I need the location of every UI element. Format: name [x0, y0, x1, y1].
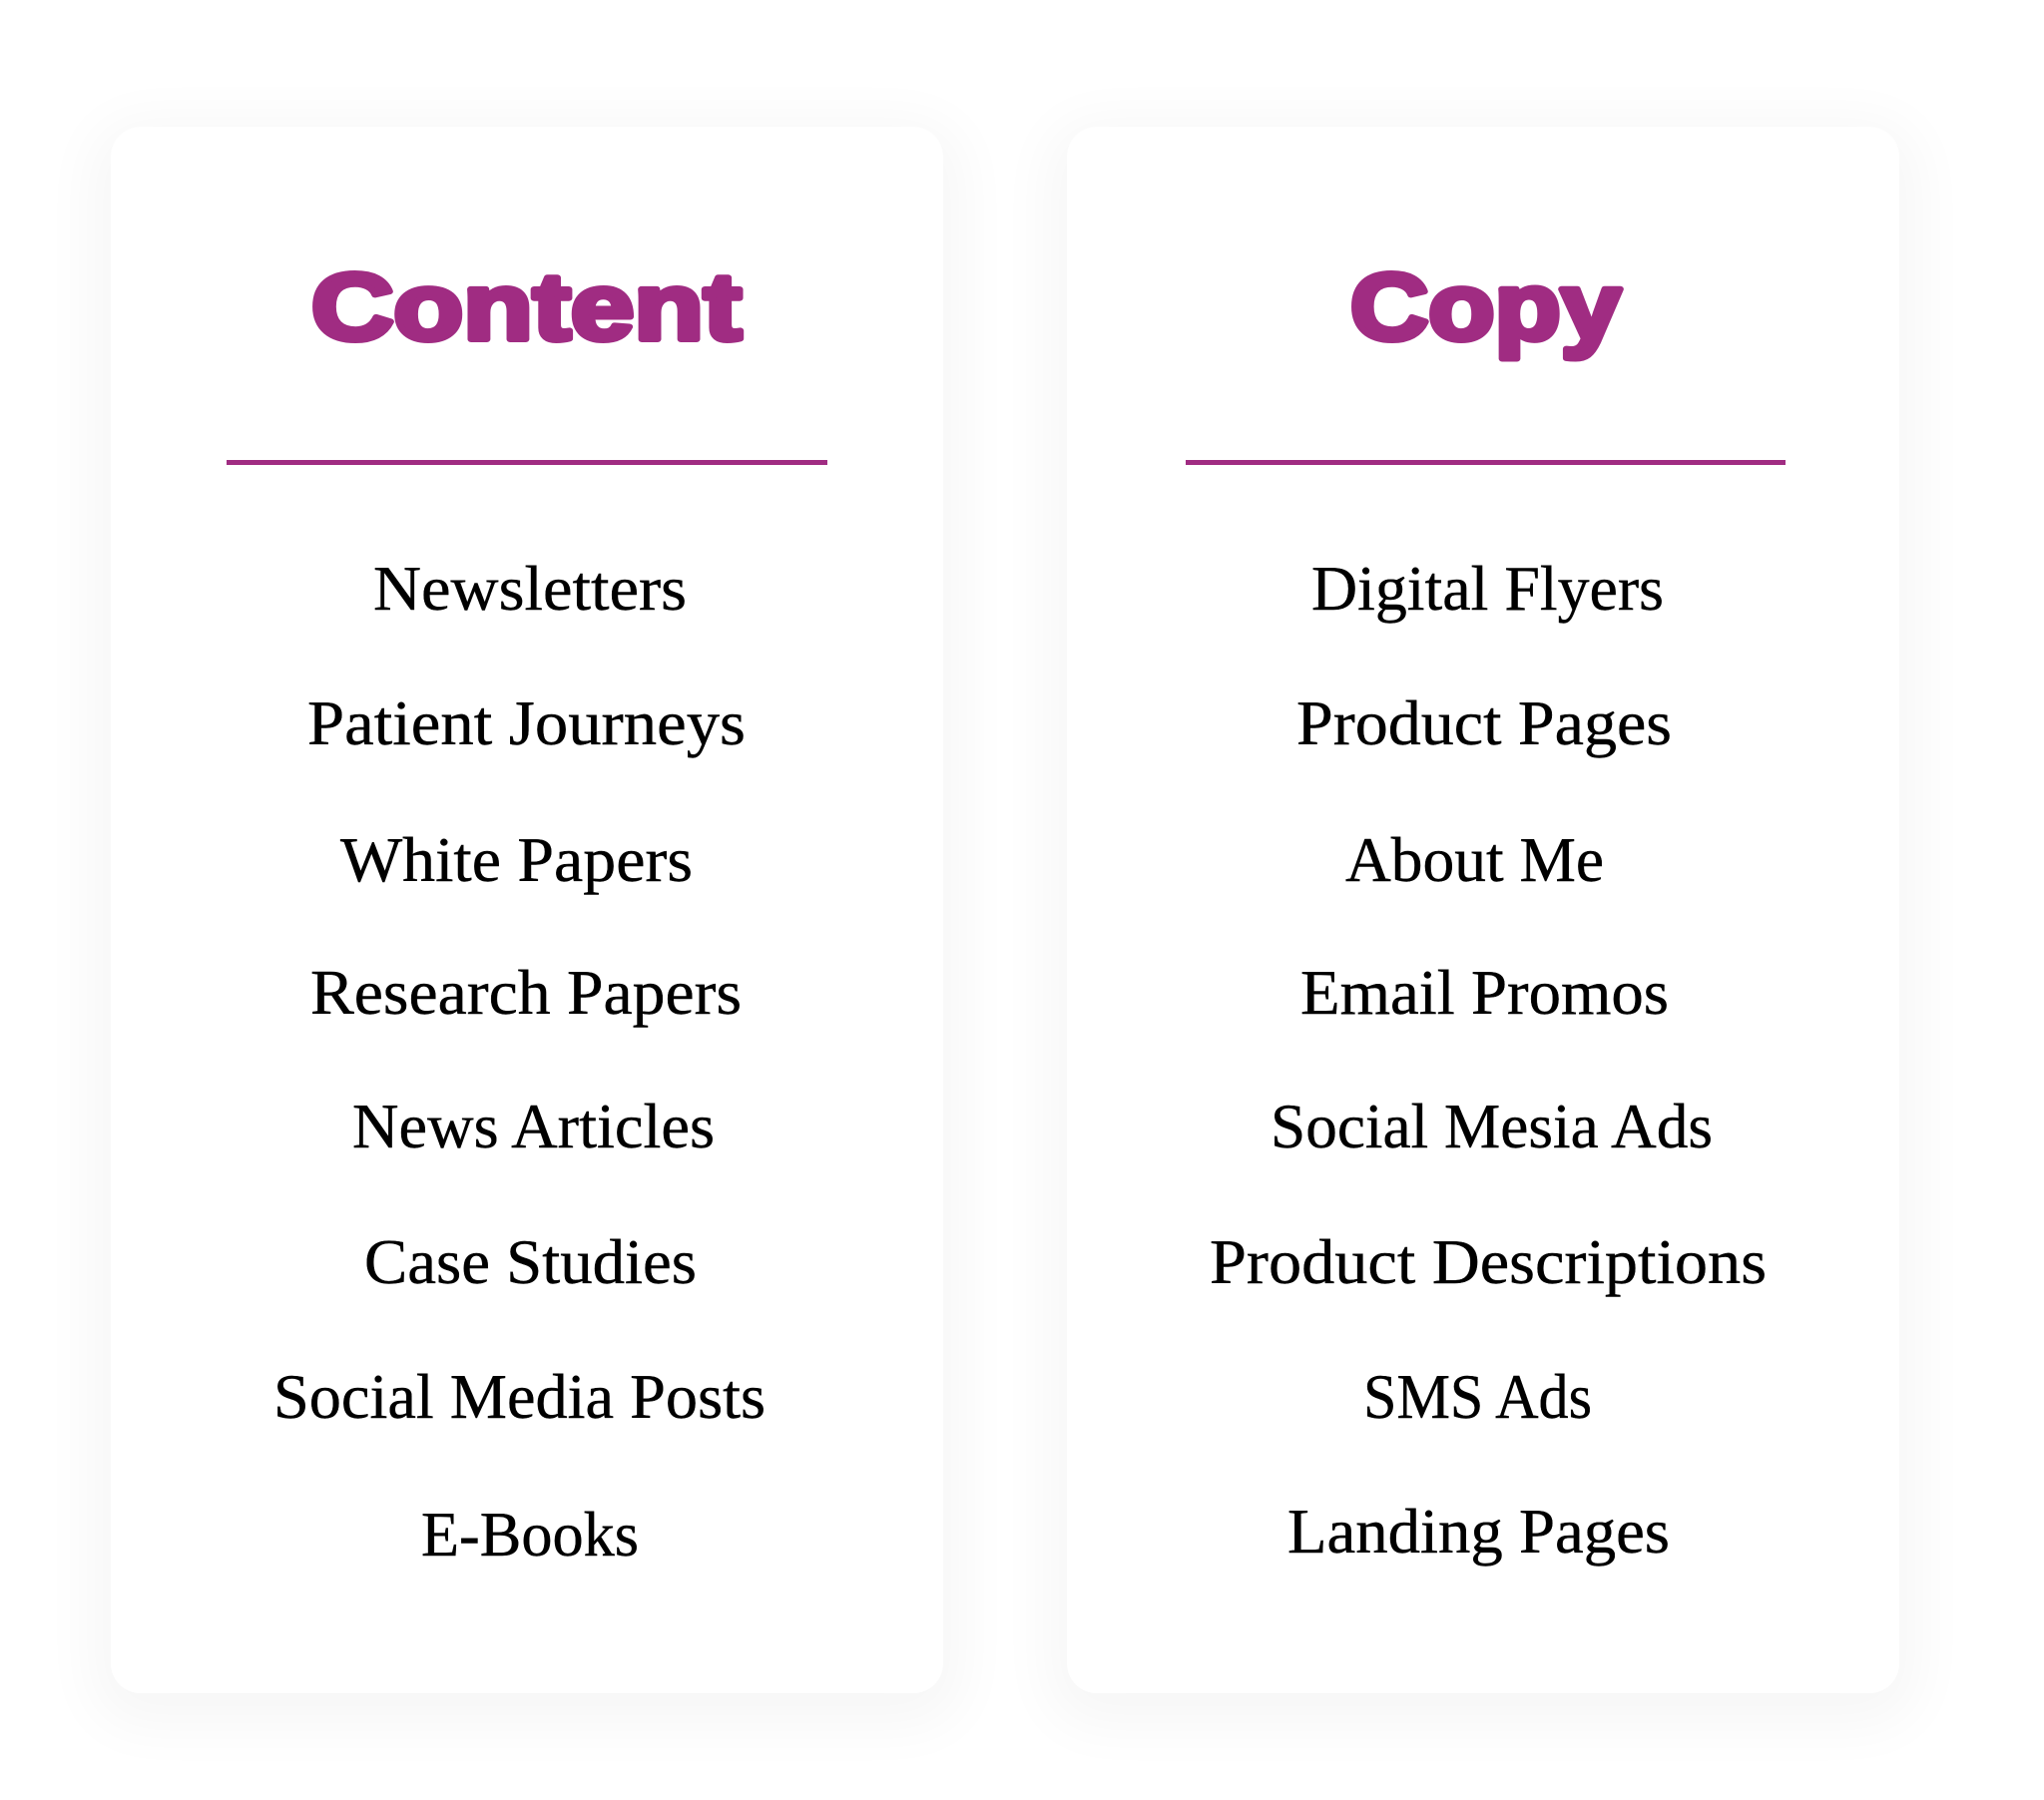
heading: Copy: Copy: [1350, 254, 1621, 360]
item: E-Books: E-Books: [421, 1499, 639, 1570]
item: About Me: About Me: [1345, 824, 1604, 895]
panel: Content card background: [111, 127, 943, 1693]
divider: Content: [227, 460, 827, 465]
panel: Copy card background: [1067, 127, 1899, 1693]
item: Landing Pages: Landing Pages: [1287, 1496, 1670, 1567]
item: Digital Flyers: Digital Flyers: [1311, 553, 1664, 624]
item: Email Promos: Email Promos: [1300, 957, 1669, 1028]
item: White Papers: White Papers: [340, 824, 693, 895]
panel: Content list: [227, 254, 827, 1570]
panel: Copy list: [1186, 254, 1786, 1567]
item: News Articles: News Articles: [352, 1091, 715, 1161]
item: Social Media Posts: Social Media Posts: [273, 1361, 766, 1432]
divider: Copy: [1186, 460, 1786, 465]
item: SMS Ads: SMS Ads: [1363, 1361, 1592, 1432]
item: Newsletters: Newsletters: [373, 553, 687, 624]
item: Research Papers: Research Papers: [310, 957, 742, 1028]
item: Patient Journeys: Patient Journeys: [307, 687, 746, 758]
item: Product Pages: Product Pages: [1296, 687, 1672, 758]
item: Product Descriptions: Product Descriptions: [1210, 1226, 1767, 1297]
item: Case Studies: Case Studies: [364, 1226, 697, 1297]
heading: Content: Content: [311, 254, 742, 360]
item: Social Mesia Ads: Social Mesia Ads: [1271, 1091, 1713, 1161]
